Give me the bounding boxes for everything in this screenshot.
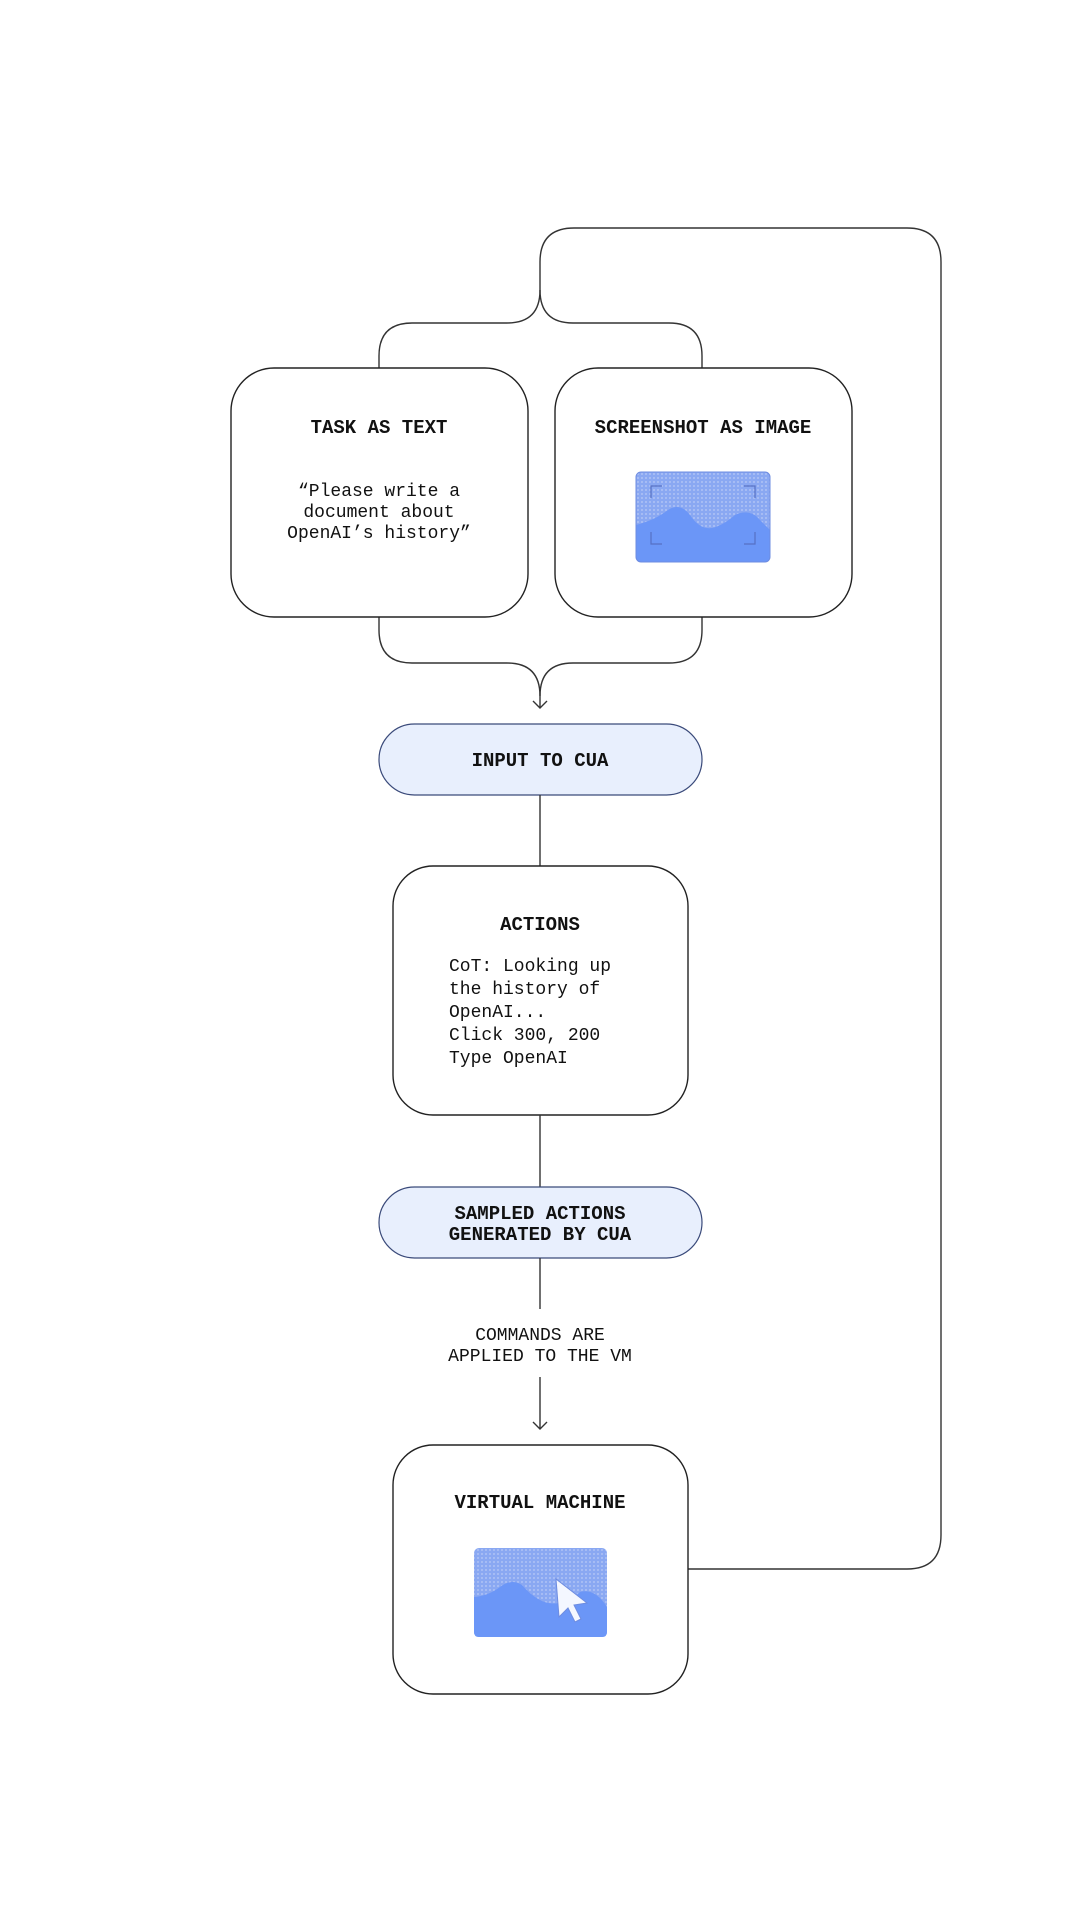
pill: input to cua [379, 724, 702, 795]
connector: top brace [379, 290, 702, 368]
panel: actions [393, 866, 688, 1115]
panel: virtual machine [393, 1445, 688, 1694]
panel: actions: Click 300, 200 [449, 1026, 600, 1046]
label: commands applied [448, 1326, 632, 1367]
pill: sampled actions: SAMPLED ACTIONS [454, 1203, 626, 1225]
panel: task as text: “Please write a [298, 482, 460, 502]
arrow: to VM [533, 1377, 547, 1429]
panel: task as text [231, 368, 528, 617]
pill: sampled actions: GENERATED BY CUA [449, 1224, 632, 1246]
panel: virtual machine: VIRTUAL MACHINE [454, 1492, 626, 1514]
connector: bottom brace with arrow [379, 617, 702, 708]
panel: actions: ACTIONS [500, 914, 580, 936]
connector: feedback loop [540, 228, 941, 1569]
panel: screenshot as image: SCREENSHOT AS IMAGE [595, 417, 811, 439]
panel: task as text: OpenAI’s history” [287, 524, 471, 544]
icon: screenshot image [636, 472, 770, 562]
label: commands applied: COMMANDS ARE [475, 1326, 605, 1346]
pill: sampled actions [379, 1187, 702, 1258]
panel: screenshot as image [555, 368, 852, 617]
label: commands applied: APPLIED TO THE VM [448, 1347, 632, 1367]
panel: actions: CoT: Looking up [449, 957, 611, 977]
panel: task as text: TASK AS TEXT [311, 417, 447, 439]
panel: actions: OpenAI... [449, 1003, 546, 1023]
panel: actions: the history of [449, 980, 600, 1000]
pill: input to cua: INPUT TO CUA [472, 750, 609, 772]
panel: task as text: document about [303, 503, 455, 523]
icon: vm screen with cursor [474, 1548, 607, 1637]
panel: actions: Type OpenAI [449, 1049, 568, 1069]
